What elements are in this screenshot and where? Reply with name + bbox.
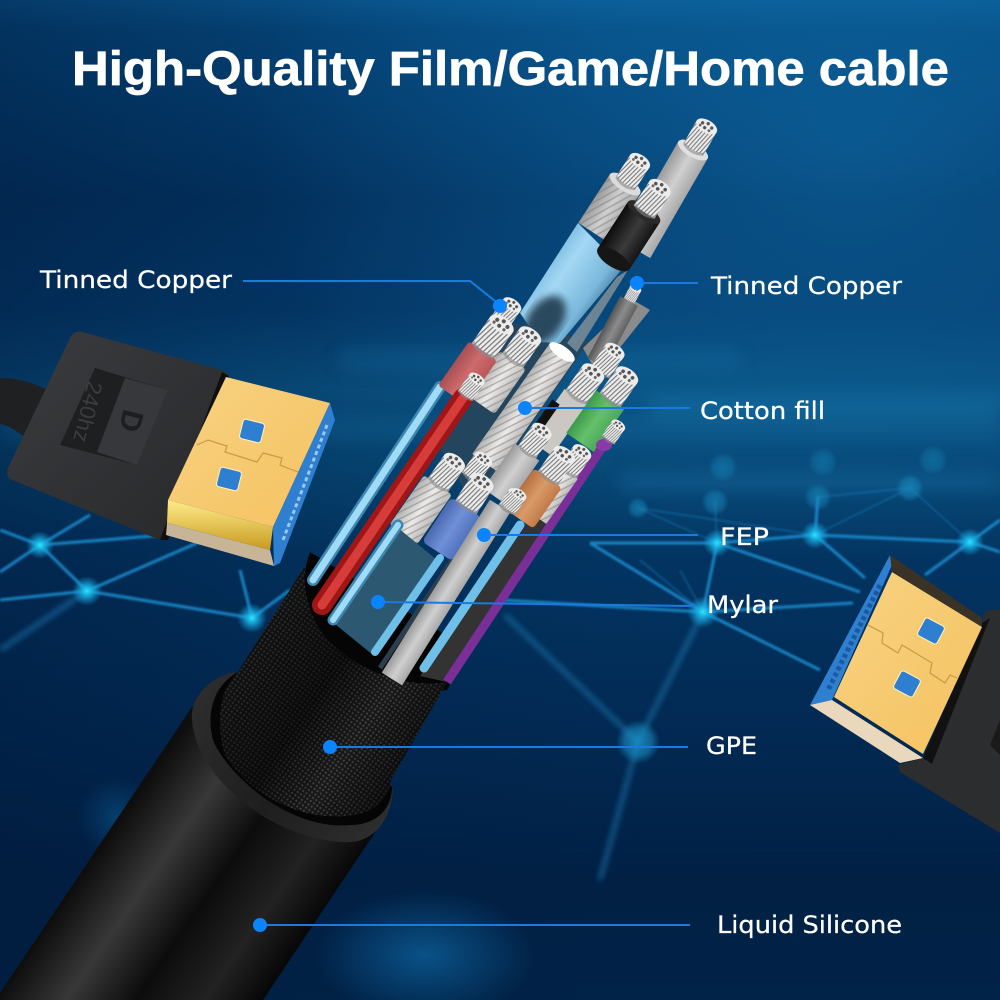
right connector housing (898, 609, 1000, 833)
orange sheath wire (505, 439, 582, 529)
callout: GPE: GPE (706, 732, 757, 760)
callout: Tinned Copper right: Tinned Copper (710, 272, 902, 300)
long top wire (621, 112, 725, 258)
left blue side (273, 403, 335, 566)
right gold contact plate (834, 572, 982, 754)
foil sleeve (520, 223, 623, 343)
light blue strip left (313, 387, 440, 580)
silver spiral sheath (578, 146, 658, 242)
callout: Tinned Copper right (630, 272, 902, 300)
callout: Liquid Silicone (253, 911, 902, 939)
callout: Liquid Silicone: Liquid Silicone (717, 911, 902, 939)
black sheath wire (593, 172, 679, 276)
callout: Cotton fill (518, 397, 825, 425)
inner black cavity (304, 552, 470, 691)
Mylar panel (330, 525, 452, 668)
green sheath wire (566, 360, 645, 452)
left gold front edge (167, 500, 273, 550)
small tip left of orange (500, 486, 529, 517)
white wire with black stripe (529, 359, 609, 456)
callout: Mylar: Mylar (707, 591, 778, 619)
white spiral lower sheath (390, 446, 472, 544)
240hz badge: 240hz (68, 379, 107, 445)
left DisplayPort connector (0, 332, 335, 566)
long grey FEP wire (382, 480, 525, 687)
callout: Tinned Copper left (39, 266, 507, 313)
240hz badge (60, 368, 168, 465)
white cotton fill bundle (472, 338, 578, 471)
blue sheath wire (422, 466, 501, 561)
purple wire and tip (447, 417, 627, 682)
GPE braided layer (220, 566, 447, 816)
grey sheath lower wire (483, 417, 558, 506)
callout: Tinned Copper left: Tinned Copper (39, 266, 232, 294)
callout: GPE (323, 732, 757, 760)
right front edge (810, 700, 923, 763)
callout: FEP: FEP (720, 523, 769, 551)
right DisplayPort connector (810, 555, 1000, 833)
silicone lip (192, 672, 393, 842)
liquid silicone outer jacket (0, 672, 392, 1000)
dark shield region behind wires (420, 450, 604, 682)
back tip above pink wire (488, 294, 524, 333)
braid shadow ring (210, 672, 392, 825)
main cable cross-section (0, 112, 725, 1000)
small wire on the right (587, 281, 646, 368)
back lower tip (460, 449, 495, 486)
black stripe (535, 402, 556, 432)
left connector housing (7, 332, 227, 539)
white wire behind orange (527, 440, 595, 524)
left gold contact plate (168, 377, 330, 527)
back sheath strip (583, 300, 650, 375)
240hz badge: D (112, 406, 149, 435)
callout: Mylar (371, 591, 778, 619)
grey sheath wire beside the pink (468, 321, 547, 414)
callout: Cotton fill: Cotton fill (700, 397, 825, 425)
left connector cable (0, 378, 48, 438)
pink sheath wire (438, 308, 520, 405)
dark foil panel behind wires (430, 320, 590, 500)
silver back tip (589, 339, 627, 381)
red wire (322, 370, 487, 605)
title: High-Quality Film/Game/Home cable (72, 43, 949, 96)
light blue strip right (424, 525, 520, 668)
foil shadow (516, 288, 574, 352)
right blue side (810, 555, 892, 705)
callout: FEP (477, 523, 769, 551)
